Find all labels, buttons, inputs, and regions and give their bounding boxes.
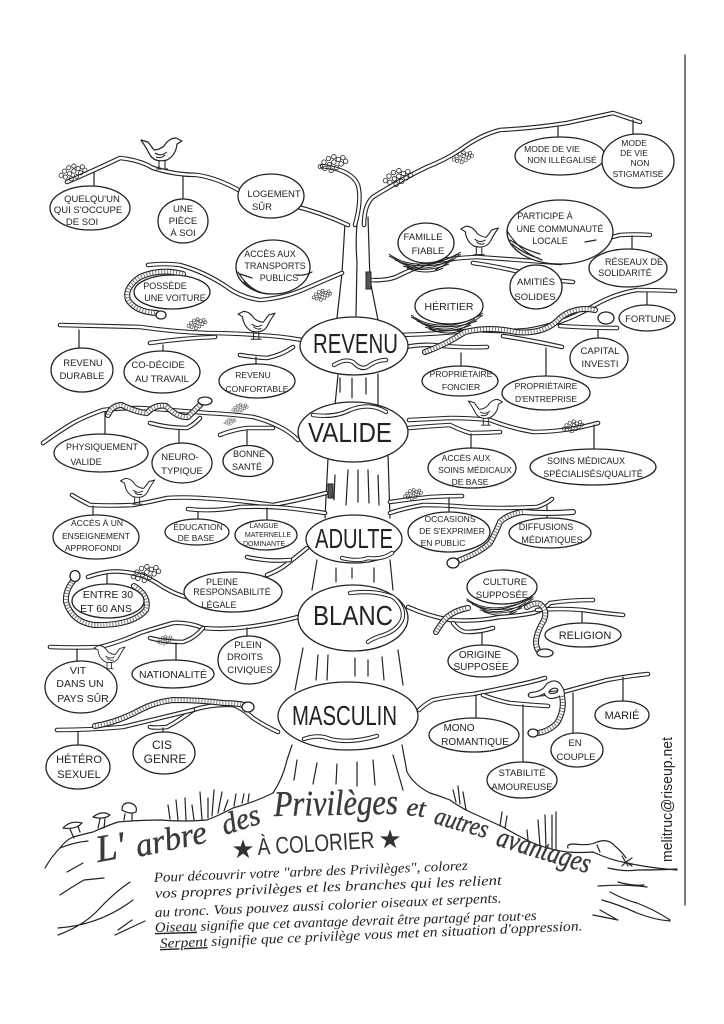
- snake: masculin left: [95, 700, 254, 726]
- title: avantages: [493, 821, 595, 880]
- label: accès aux soins médicaux de base: [428, 448, 516, 488]
- label: logement sûr: [238, 174, 304, 218]
- icon: hinge on trunk: [328, 484, 333, 498]
- page border line: [684, 55, 686, 905]
- label: mode de vie non stigmatisé: DE VIE: [620, 148, 648, 158]
- label: neuro-typique: [152, 443, 212, 483]
- label: mode de vie non stigmatisé: NON: [631, 158, 649, 168]
- label: accès aux transports publics: ACCÈS AUX: [244, 249, 296, 259]
- label: religion: RELIGION: [559, 630, 611, 642]
- oval: adulte: [306, 515, 402, 563]
- branch: upper right main: [364, 113, 640, 225]
- label: cis genre: [133, 732, 195, 774]
- label: propriétaire foncier: PROPRIÉTAIRE: [430, 369, 493, 379]
- label: revenu durable: [51, 348, 113, 392]
- label: quelqu'un qui s'occupe de soi: QUELQU'UN: [64, 194, 120, 205]
- icon: birds: [94, 138, 502, 669]
- label: bonne santé: SANTÉ: [232, 462, 262, 472]
- label: pleine responsabilité légale: LÉGALE: [201, 600, 237, 610]
- instructions text: vos propres privilèges et les branches qui les relient: [155, 874, 503, 902]
- label: héritier: [415, 288, 483, 324]
- label: accès aux transports publics: [236, 240, 312, 294]
- label: en couple: EN: [568, 738, 582, 749]
- title: L': [91, 824, 129, 871]
- label: diffusions médiatiques: MÉDIATIQUES: [521, 535, 583, 545]
- instructions text: au tronc. Vous pouvez aussi colorier oiseaux et serpents.: [155, 891, 502, 921]
- label: langue maternelle dominante: MATERNELLE: [245, 532, 291, 539]
- icon: small animal on ground: [568, 841, 632, 866]
- label: éducation de base: ÉDUCATION: [173, 522, 223, 532]
- ground and grass: [45, 786, 677, 935]
- label: mono romantique: MONO: [443, 723, 475, 734]
- label: revenu confortable: CONFORTABLE: [226, 384, 289, 394]
- label: stabilité amoureuse: AMOUREUSE: [491, 782, 553, 793]
- oval: blanc: [298, 585, 408, 651]
- label: possède une voiture: [134, 275, 210, 309]
- snake: entre 30 et 60 ans: [66, 570, 147, 625]
- label: propriétaire foncier: FONCIER: [442, 382, 480, 392]
- label: en couple: [551, 733, 603, 767]
- title: arbre: [132, 815, 210, 865]
- label: langue maternelle dominante: LANGUE: [250, 523, 279, 530]
- branch: revenu right: [400, 290, 675, 377]
- label: pleine responsabilité légale: RESPONSABILITÉ: [193, 587, 271, 597]
- oval: revenu: [300, 317, 408, 375]
- label: une pièce à soi: À SOI: [170, 228, 196, 239]
- branch: masculin right: [419, 674, 648, 762]
- label: amitiés solides: AMITIÉS: [517, 277, 555, 288]
- label: stabilité amoureuse: STABILITÉ: [499, 768, 545, 779]
- label: mode de vie non illégalisé: MODE DE VIE: [524, 144, 580, 154]
- branch: pleine responsabilité: [88, 548, 307, 597]
- subtitle: à colorier: À COLORIER: [257, 827, 375, 861]
- label: bonne santé: BONNE: [233, 449, 265, 459]
- label: pleine responsabilité légale: [184, 572, 282, 612]
- label: une pièce à soi: UNE: [173, 204, 193, 215]
- label: vit dans un pays sûr: DANS UN: [56, 678, 104, 690]
- label: héritier: HÉRITIER: [424, 300, 474, 313]
- label: capital investi: CAPITAL: [581, 346, 619, 357]
- instructions text: Oiseau signifie que cet avantage devrait être partagé par tout·es: [155, 909, 538, 936]
- label: co-décide au travail: CO-DÉCIDE: [131, 360, 185, 371]
- label: neuro-typique: TYPIQUE: [161, 466, 203, 477]
- snake: valide left: [108, 397, 212, 417]
- label: cis genre: CIS: [152, 738, 172, 752]
- instructions text: [153, 859, 583, 952]
- label: propriétaire d'entreprise: PROPRIÉTAIRE: [515, 381, 578, 391]
- label: accès à un enseignement approfondi: ENSEIGNEMENT: [62, 531, 130, 541]
- tree trunk: [273, 214, 430, 793]
- label: physiquement valide: VALIDE: [70, 457, 102, 467]
- snake: diffusions: [447, 512, 573, 568]
- label: hétéro sexuel: HÉTÉRO: [56, 753, 102, 766]
- branch: adulte right: [390, 496, 552, 518]
- label: occasions de s'exprimer en public: DE S'EXPRIMER: [419, 526, 485, 536]
- branch: logement: [67, 158, 348, 225]
- label: origine supposée: ORIGINE: [459, 650, 501, 661]
- label: langue maternelle dominante: [235, 520, 297, 550]
- label: éducation de base: DE BASE: [178, 533, 215, 543]
- branch: famille fiable: [370, 234, 650, 282]
- instructions text: Serpent signifie que ce privilège vous met en situation d'oppression.: [160, 919, 583, 952]
- main ovals on trunk: [278, 317, 418, 750]
- label: diffusions médiatiques: DIFFUSIONS: [519, 522, 573, 532]
- label: occasions de s'exprimer en public: [408, 512, 490, 552]
- label: plein droits civiques: DROITS: [227, 652, 263, 663]
- label: langue maternelle dominante: DOMINANTE: [243, 541, 285, 548]
- label: accès à un enseignement approfondi: [53, 515, 139, 559]
- title: et: [405, 792, 428, 823]
- label: entre 30 et 60 ans: [72, 584, 144, 618]
- title: Privilèges: [273, 782, 398, 824]
- label: occasions de s'exprimer en public: EN PUBLIC: [421, 538, 465, 548]
- snake: revenu right: [425, 309, 614, 352]
- branch: revenu left: [60, 325, 302, 366]
- label: cis genre: GENRE: [144, 752, 186, 766]
- label: revenu confortable: REVENU: [235, 370, 271, 380]
- label: propriétaire foncier: [422, 366, 498, 396]
- title: des: [217, 798, 264, 842]
- label: famille fiable: FIABLE: [412, 246, 444, 257]
- label: logement sûr: SÛR: [252, 202, 272, 213]
- branch: valide left: [43, 408, 298, 447]
- label: mode de vie non illégalisé: NON ILLÉGALISÉ: [527, 155, 597, 165]
- label: soins médicaux spécialisés/qualité: SPÉCIALISÉS/QUALITÉ: [543, 469, 643, 479]
- title: [91, 782, 595, 880]
- label: capital investi: [570, 338, 628, 378]
- label: stabilité amoureuse: [487, 762, 557, 798]
- label: possède une voiture: POSSÈDE: [143, 281, 187, 291]
- label: amitiés solides: [510, 265, 562, 309]
- label: entre 30 et 60 ans: ET 60 ANS: [80, 603, 132, 615]
- title: autres: [431, 801, 492, 844]
- label: accès aux soins médicaux de base: SOINS MÉDICAUX: [438, 465, 512, 475]
- label: culture supposée: SUPPOSÉE: [476, 590, 528, 601]
- label: hétéro sexuel: SEXUEL: [57, 769, 101, 781]
- label: logement sûr: LOGEMENT: [247, 189, 301, 200]
- label: accès aux transports publics: TRANSPORTS: [244, 261, 306, 271]
- label: quelqu'un qui s'occupe de soi: QUI S'OCCUPE: [54, 205, 122, 216]
- label: fortune: FORTUNE: [625, 314, 671, 325]
- snake: possède une voiture: [127, 272, 183, 319]
- label: origine supposée: SUPPOSÉE: [453, 660, 509, 673]
- label: mode de vie non stigmatisé: [602, 134, 674, 188]
- label: quelqu'un qui s'occupe de soi: [50, 186, 130, 230]
- label: mode de vie non illégalisé: [515, 137, 605, 175]
- label: mode de vie non stigmatisé: STIGMATISÉ: [613, 169, 664, 179]
- label: pleine responsabilité légale: PLEINE: [206, 577, 238, 587]
- label: participe à une communauté locale: [507, 200, 613, 264]
- branch: upper left fork: [322, 166, 359, 225]
- label: réseaux de solidarité: SOLIDARITÉ: [598, 268, 652, 278]
- label: famille fiable: FAMILLE: [403, 232, 443, 243]
- label: culture supposée: CULTURE: [483, 577, 527, 588]
- label: propriétaire d'entreprise: D'ENTREPRISE: [515, 394, 577, 404]
- icon: hinge on trunk: [366, 272, 371, 289]
- branch: valide right: [409, 418, 598, 449]
- label: capital investi: INVESTI: [582, 359, 618, 370]
- snakes: [66, 272, 614, 737]
- label: co-décide au travail: AU TRAVAIL: [135, 374, 189, 385]
- label: réseaux de solidarité: RÉSEAUX DE: [605, 257, 663, 267]
- label: entre 30 et 60 ans: ENTRE 30: [83, 589, 133, 601]
- label: mono romantique: ROMANTIQUE: [441, 737, 509, 748]
- branch: blanc right: [408, 600, 623, 645]
- label: quelqu'un qui s'occupe de soi: DE SOI: [66, 217, 98, 228]
- label: physiquement valide: [54, 434, 148, 472]
- label: une pièce à soi: PIÈCE: [169, 216, 197, 227]
- oval: masculin: MASCULIN: [292, 700, 397, 731]
- label: mode de vie non stigmatisé: MODE: [621, 138, 647, 148]
- label: accès à un enseignement approfondi: ACCÈS À UN: [71, 518, 123, 528]
- label: accès aux soins médicaux de base: ACCÈS AUX: [442, 453, 491, 463]
- label: accès aux transports publics: PUBLICS: [260, 273, 298, 283]
- label: réseaux de solidarité: [589, 249, 667, 287]
- label: vit dans un pays sûr: PAYS SÛR: [57, 692, 109, 705]
- oval: valide: [298, 402, 408, 462]
- label: une pièce à soi: [158, 199, 208, 243]
- signature: melitruc@riseup.net: [659, 736, 676, 862]
- label: participe à une communauté locale: UNE COMMUNAUTÉ: [516, 224, 604, 234]
- label: en couple: COUPLE: [556, 752, 596, 763]
- label: amitiés solides: SOLIDES: [514, 292, 556, 303]
- subtitle: à colorier: ★: [231, 834, 255, 864]
- label: accès aux soins médicaux de base: DE BASE: [452, 477, 489, 487]
- label: participe à une communauté locale: PARTICIPE À: [517, 211, 573, 221]
- label: marié: MARIÉ: [605, 709, 639, 722]
- snake: nest left: [436, 608, 468, 632]
- branch: blanc left: [50, 617, 298, 661]
- label: plein droits civiques: CIVIQUES: [227, 665, 273, 676]
- label: plein droits civiques: PLEIN: [234, 640, 262, 651]
- label: co-décide au travail: [124, 351, 200, 393]
- label: vit dans un pays sûr: VIT: [70, 665, 87, 677]
- label: hétéro sexuel: [46, 745, 110, 789]
- label: éducation de base: [165, 519, 229, 545]
- label: soins médicaux spécialisés/qualité: SOINS MÉDICAUX: [547, 456, 625, 466]
- label: physiquement valide: PHYSIQUEMENT: [66, 442, 139, 452]
- branch: accès transports: [148, 264, 342, 300]
- label: nationalité: [132, 660, 214, 688]
- oval: revenu: REVENU: [313, 328, 398, 359]
- snake: knot: [528, 683, 563, 737]
- label: nationalité: NATIONALITÉ: [139, 668, 207, 681]
- label: religion: [545, 623, 621, 647]
- label: revenu durable: REVENU: [63, 358, 103, 369]
- label: culture supposée: [467, 570, 537, 604]
- subtitle: à colorier: ★: [378, 824, 402, 854]
- label: accès à un enseignement approfondi: APPROFONDI: [65, 543, 121, 553]
- label: diffusions médiatiques: [509, 518, 591, 548]
- icon: nests: [389, 252, 533, 615]
- branch: masculin left: [57, 705, 278, 745]
- label: soins médicaux spécialisés/qualité: [530, 449, 656, 485]
- label: occasions de s'exprimer en public: OCCASIONS: [424, 514, 476, 524]
- label: plein droits civiques: [218, 636, 280, 684]
- oval: masculin: [278, 682, 418, 750]
- oval: valide: VALIDE: [308, 417, 392, 448]
- label: origine supposée: [448, 645, 518, 677]
- instructions text: Pour découvrir votre "arbre des Privilèges", colorez: [153, 859, 469, 886]
- label: participe à une communauté locale: LOCALE: [532, 236, 568, 246]
- label: vit dans un pays sûr: [45, 661, 117, 713]
- oval: adulte: ADULTE: [315, 523, 393, 554]
- label: revenu confortable: [219, 364, 295, 398]
- label: revenu durable: DURABLE: [60, 371, 104, 382]
- icon: mushrooms: [63, 803, 136, 838]
- snake: religion: [527, 603, 553, 657]
- label: mono romantique: [429, 718, 519, 752]
- label: bonne santé: [223, 446, 273, 476]
- label: possède une voiture: UNE VOITURE: [144, 293, 206, 303]
- label: fortune: [619, 305, 675, 331]
- label: famille fiable: [398, 223, 454, 263]
- label: marié: [595, 701, 649, 729]
- oval: blanc: BLANC: [313, 600, 393, 631]
- label: neuro-typique: NEURO-: [161, 452, 199, 463]
- label: propriétaire d'entreprise: [502, 376, 590, 410]
- leaves: [59, 151, 584, 645]
- branch: adulte left: [72, 493, 326, 520]
